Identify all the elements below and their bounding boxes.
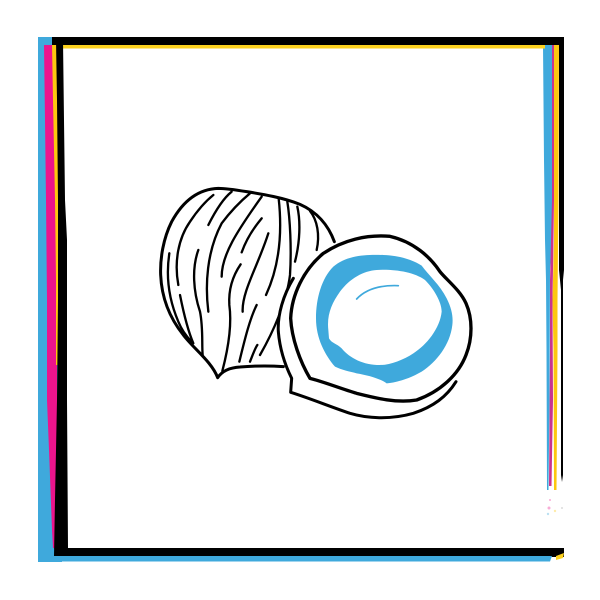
top yellow stripe	[63, 44, 545, 48]
bottom black bar	[54, 548, 564, 557]
speckles: faded ink	[547, 499, 563, 515]
kernel highlight	[357, 286, 398, 299]
cut face outline	[291, 236, 471, 401]
whole nut outline	[161, 188, 334, 378]
left blue stripe	[38, 37, 62, 562]
bottom right yellow corner	[556, 553, 564, 560]
top black bar	[52, 37, 564, 45]
left magenta stripe	[44, 45, 57, 548]
right black bar	[559, 40, 564, 482]
blue kernel ring	[316, 255, 453, 383]
right yellow stripe	[552, 44, 559, 490]
left yellow stripe	[52, 44, 59, 365]
whole nut grain lines	[168, 192, 318, 371]
right blue stripe	[543, 45, 553, 490]
left black bar	[54, 40, 68, 556]
right magenta stripe	[549, 45, 554, 486]
lower shell	[278, 278, 456, 418]
frame: offset print border	[38, 37, 564, 562]
bottom blue stripe	[50, 556, 552, 562]
nut group	[161, 188, 471, 418]
whole hazelnut	[161, 188, 334, 378]
cut hazelnut	[278, 236, 471, 418]
